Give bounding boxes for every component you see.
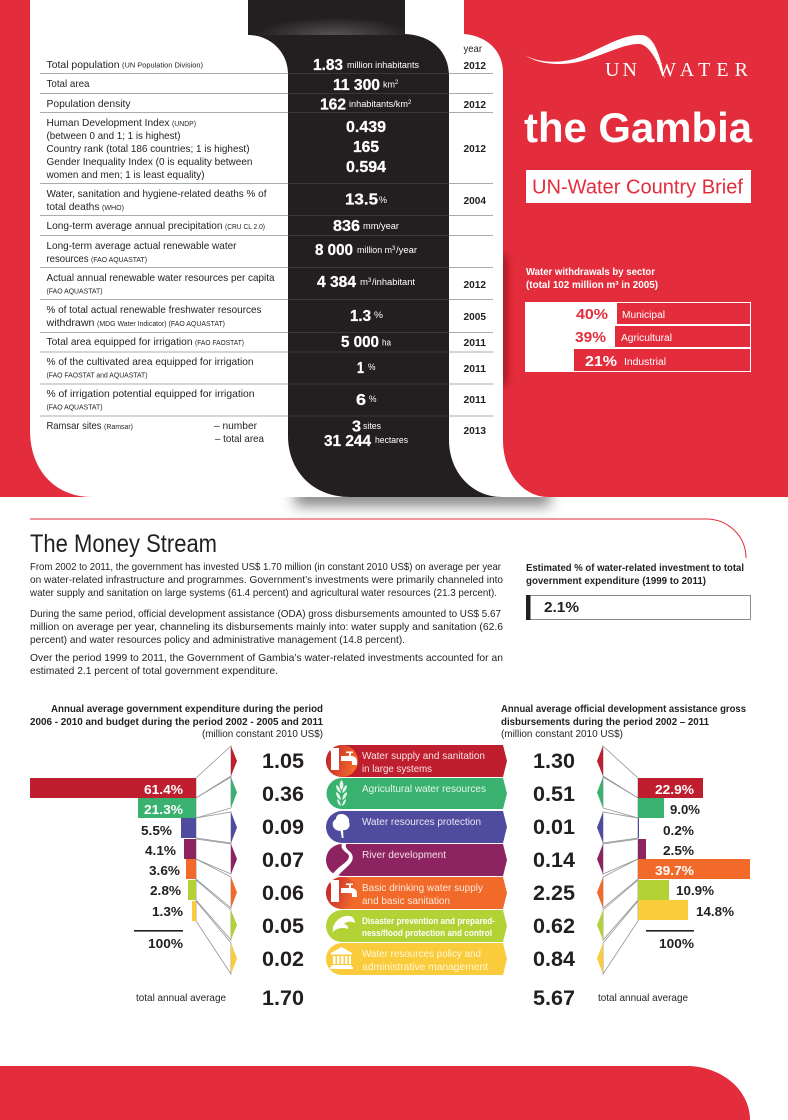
category: basic drinking water supply <box>326 877 507 909</box>
chart: water withdrawals by sector: 40% <box>576 307 608 323</box>
indicator labels: women and men; 1 is least equality) <box>46 169 204 181</box>
indicator labels: – number <box>214 420 257 432</box>
indicator values: inhabitants/km <box>349 99 408 109</box>
chart heading: government expenditure: Annual average government expenditure during the period <box>51 703 323 715</box>
icon: institution building <box>330 947 353 969</box>
percentage labels: 39.7% <box>655 864 694 878</box>
indicator values: % <box>368 362 376 372</box>
text block: money stream narrative: percent) and water resources policy and administrative management (14.8 percent). <box>30 634 405 646</box>
indicator values: m <box>360 277 368 287</box>
indicator values: mm/year <box>363 221 399 231</box>
ODA values: total annual average <box>598 992 688 1004</box>
percentage labels <box>134 783 183 951</box>
category: disaster prevention: Disaster prevention and prepared- <box>362 916 495 927</box>
chart heading: government expenditure <box>30 703 323 740</box>
government values: 0.06 <box>262 882 304 905</box>
UN-Water logo: UN <box>605 59 637 81</box>
percentage labels: 100% <box>659 937 694 951</box>
category: water supply and sanitation in large systems <box>326 745 507 777</box>
percentage labels: 9.0% <box>670 803 700 817</box>
category: basic drinking water supply: and basic sanitation <box>362 895 450 907</box>
ODA values <box>533 750 688 1010</box>
indicator labels: – total area <box>215 433 264 445</box>
indicator values: ha <box>382 338 391 348</box>
subtitle box: UN-Water Country Brief <box>532 176 743 198</box>
indicator labels <box>45 59 275 445</box>
indicator labels: (Ramsar) <box>104 424 133 431</box>
indicator values: 1.3 <box>350 308 371 325</box>
indicator labels: (CRU CL 2.0) <box>225 224 265 231</box>
chart heading: Water withdrawals by sector <box>526 266 655 278</box>
year column: 2005 <box>464 311 486 323</box>
indicator values: 3 <box>352 418 361 436</box>
indicator labels: Human Development Index <box>46 117 170 129</box>
category: water resources protection <box>326 811 507 843</box>
chart: government expenditure bars <box>30 746 304 1010</box>
text block: money stream narrative: From 2002 to 2011, the government has invested US$ 1.70 million (in constant 2010 US$) on average per year <box>30 561 501 573</box>
percentage labels: 14.8% <box>696 905 734 919</box>
category: agricultural water resources <box>326 778 507 809</box>
chart heading: government expenditure: (million constant 2010 US$) <box>202 728 323 740</box>
indicator values: 11 300 <box>333 77 380 94</box>
indicator labels: Ramsar sites <box>46 420 102 432</box>
indicator values: 8 000 <box>315 242 353 259</box>
category: water resources policy: Water resources policy and <box>362 948 481 960</box>
chart heading <box>526 266 658 291</box>
category: water resources policy: administrative management <box>362 961 488 973</box>
black values column <box>248 0 502 497</box>
indicator labels: Total area equipped for irrigation <box>46 336 193 348</box>
percentage labels: 3.6% <box>149 864 180 878</box>
government values: 0.07 <box>262 849 304 872</box>
callout: investment share: government expenditure (1999 to 2011) <box>526 575 706 587</box>
government values: 1.70 <box>262 987 304 1010</box>
indicator values <box>313 57 419 450</box>
percentage labels <box>646 783 734 951</box>
government values: total annual average <box>136 992 226 1004</box>
year column: 2012 <box>464 60 486 72</box>
year column: 2013 <box>464 425 486 437</box>
chart: water withdrawals by sector: Agricultural <box>621 333 672 344</box>
government values: 0.09 <box>262 816 304 839</box>
indicator values: 3 <box>368 278 372 284</box>
chart heading: official development assistance: (million constant 2010 US$) <box>501 728 623 740</box>
row divider lines <box>40 74 493 416</box>
chart: water withdrawals by sector: Industrial <box>624 357 666 368</box>
indicator values: 1 <box>357 360 364 377</box>
indicator values: million inhabitants <box>347 60 419 70</box>
chart heading: (total 102 million m³ in 2005) <box>526 279 658 291</box>
subtitle box <box>526 170 751 203</box>
indicator labels: Country rank (total 186 countries; 1 is highest) <box>46 143 250 155</box>
indicator labels: (FAO AQUASTAT) <box>46 404 102 412</box>
year column: 2012 <box>464 143 486 155</box>
category: water resources protection: Water resources protection <box>362 816 481 828</box>
indicator labels: (between 0 and 1; 1 is highest) <box>46 130 180 142</box>
icon: tree <box>333 814 350 838</box>
year column: 2011 <box>464 394 486 406</box>
indicator labels: Total area <box>46 78 90 90</box>
percentage labels: 21.3% <box>144 803 183 817</box>
indicator values: 0.439 <box>346 119 386 136</box>
chart: official development assistance bars <box>533 746 750 1010</box>
text block: money stream narrative: estimated 2.1 percent of total government expenditure. <box>30 665 278 677</box>
indicator labels: (UNDP) <box>172 121 196 128</box>
percentage labels: 22.9% <box>655 783 694 797</box>
white table panel <box>30 0 548 497</box>
ODA values: 0.62 <box>533 915 575 938</box>
indicator values: % <box>374 310 383 320</box>
category: water supply and sanitation in large systems: in large systems <box>362 763 432 775</box>
section rule <box>30 519 746 558</box>
chart: water withdrawals by sector <box>525 266 751 372</box>
indicator labels: Total population <box>46 59 120 71</box>
indicator values: million m <box>357 245 392 255</box>
indicator labels: Water, sanitation and hygiene-related deaths % of <box>46 188 267 200</box>
indicator values: /year <box>396 245 417 255</box>
indicator values: % <box>379 195 387 205</box>
indicator labels: % of the cultivated area equipped for irrigation <box>46 356 254 368</box>
text block: money stream narrative: water supply and sanitation on large systems (61.4 percent) and agricultural water resources (21.3 percent). <box>29 587 497 599</box>
indicator labels: Population density <box>46 98 131 110</box>
icon: wheat <box>336 780 347 806</box>
year column: 2011 <box>464 363 486 375</box>
connector shapes <box>603 746 638 974</box>
indicator values: sites <box>363 421 381 431</box>
ODA values: 0.14 <box>533 849 575 872</box>
legend: water categories <box>326 745 507 975</box>
heading: The Money Stream: The Money Stream <box>30 530 217 558</box>
bottom red band <box>0 1066 750 1120</box>
year column: 2012 <box>464 279 486 291</box>
arrow markers <box>231 746 237 974</box>
indicator labels: Gender Inequality Index (0 is equality between <box>46 156 253 168</box>
icon: river <box>331 844 353 876</box>
indicator values: 2 <box>395 80 399 86</box>
year column <box>464 43 486 437</box>
text block: money stream narrative: million on average per year, channeling its disbursements mainly into: water supply and sanitation (62.6 <box>30 621 503 633</box>
indicator labels: Long-term average actual renewable water <box>46 240 237 252</box>
indicator values: 836 <box>333 218 360 235</box>
indicator labels: (UN Population Division) <box>122 62 203 70</box>
chart: water withdrawals by sector: 21% <box>585 354 617 370</box>
indicator labels: (WHO) <box>102 205 124 212</box>
category: agricultural water resources: Agricultural water resources <box>362 783 486 795</box>
ODA values: 0.84 <box>533 948 575 971</box>
connector shapes <box>196 746 231 974</box>
percentage labels: 100% <box>148 937 183 951</box>
ODA values: 5.67 <box>533 987 575 1010</box>
percentage bars <box>30 778 196 921</box>
indicator values: % <box>369 394 376 404</box>
shadow on red beside white panel <box>497 255 507 385</box>
percentage labels: 0.2% <box>663 824 694 838</box>
UN-Water logo: WATER <box>657 59 749 81</box>
text block: money stream narrative <box>29 561 503 677</box>
icon: wave <box>332 916 355 933</box>
government values: 0.36 <box>262 783 304 806</box>
category: basic drinking water supply: Basic drinking water supply <box>362 882 484 894</box>
indicator values: 4 384 <box>317 274 356 291</box>
category: water resources policy <box>326 943 507 975</box>
red header background <box>0 0 788 497</box>
logo swoosh <box>525 35 665 79</box>
text block: money stream narrative: on water-related infrastructure and programmes. Government’s investments were primarily channeled into <box>30 574 503 586</box>
indicator labels: Long-term average annual precipitation <box>46 220 223 232</box>
year column: year <box>464 43 482 55</box>
indicator values: 6 <box>356 392 366 409</box>
indicator labels: (MDG Water Indicator) (FAO AQUASTAT) <box>97 321 225 328</box>
indicator labels: (FAO AQUASTAT) <box>91 257 147 264</box>
panel: country data table <box>30 0 548 497</box>
indicator values: 5 000 <box>341 334 379 351</box>
drop shadow under data table <box>295 486 550 506</box>
icon: tap and tank <box>330 880 357 902</box>
arrow markers <box>597 746 603 974</box>
indicator values: 2 <box>408 100 412 106</box>
callout: investment share: Estimated % of water-related investment to total <box>526 562 744 574</box>
category: water supply and sanitation in large systems: Water supply and sanitation <box>362 750 485 762</box>
chart: water withdrawals by sector: 39% <box>575 330 606 346</box>
indicator values: 13.5 <box>345 192 378 208</box>
category: river development: River development <box>362 849 446 861</box>
ODA values: 1.30 <box>533 750 575 773</box>
top glow <box>248 0 405 35</box>
indicator labels: % of irrigation potential equipped for irrigation <box>46 388 255 400</box>
indicator values: 1.83 <box>313 57 343 74</box>
government values: 0.02 <box>262 948 304 971</box>
government values <box>136 750 304 1010</box>
ODA values: 0.01 <box>533 816 575 839</box>
indicator values: 3 <box>392 246 396 252</box>
percentage labels: 2.5% <box>663 844 694 858</box>
percentage labels: 61.4% <box>144 783 183 797</box>
indicator values: 165 <box>353 139 379 156</box>
title: the Gambia: the Gambia <box>524 104 753 151</box>
percentage labels: 10.9% <box>676 884 714 898</box>
category: disaster prevention <box>326 910 507 942</box>
percentage bars <box>638 778 750 920</box>
indicator labels: % of total actual renewable freshwater resources <box>46 304 262 316</box>
government values: 0.05 <box>262 915 304 938</box>
year column: 2012 <box>464 99 486 111</box>
government values: 1.05 <box>262 750 304 773</box>
UN-Water logo <box>525 35 749 81</box>
year column: 2004 <box>464 195 486 207</box>
text block: money stream narrative: During the same period, official development assistance (ODA) gross disbursements amounted to US$ 5.67 <box>30 608 501 620</box>
indicator values: 0.594 <box>346 159 386 176</box>
indicator labels: (FAO FAOSTAT and AQUASTAT) <box>46 372 148 380</box>
percentage labels: 5.5% <box>141 824 172 838</box>
callout: investment share <box>526 562 750 620</box>
indicator values: 31 244 <box>324 433 371 450</box>
chart heading: official development assistance <box>501 703 746 740</box>
indicator values: hectares <box>375 435 408 445</box>
icon: tap and tank <box>330 748 357 770</box>
indicator labels: (FAO AQUASTAT) <box>46 288 102 296</box>
percentage labels: 4.1% <box>145 844 176 858</box>
ODA values: 2.25 <box>533 882 575 905</box>
chart heading: official development assistance: Annual average official development assistance gross <box>501 703 746 715</box>
indicator labels: Actual annual renewable water resources per capita <box>46 272 275 284</box>
indicator values: km <box>383 80 395 90</box>
percentage labels: 1.3% <box>152 905 183 919</box>
indicator labels: withdrawn <box>45 317 95 329</box>
percentage labels: 2.8% <box>150 884 181 898</box>
indicator labels: (FAO FAOSTAT) <box>195 340 244 347</box>
callout: investment share: 2.1% <box>544 600 579 616</box>
category: river development <box>326 844 507 876</box>
indicator labels: total deaths <box>46 201 100 213</box>
chart heading: government expenditure: 2006 - 2010 and budget during the period 2002 - 2005 and 2011 <box>30 716 323 728</box>
ODA values: 0.51 <box>533 783 575 806</box>
category: disaster prevention: ness/flood protection and control <box>362 928 492 939</box>
text block: money stream narrative: Over the period 1999 to 2011, the Government of Gambia’s water-related investments accounted for an <box>30 652 503 664</box>
chart: water withdrawals by sector: Municipal <box>622 310 665 321</box>
chart heading: official development assistance: disbursements during the period 2002 – 2011 <box>501 716 709 728</box>
indicator values: /inhabitant <box>372 277 416 287</box>
indicator labels: resources <box>46 253 88 265</box>
indicator values: 162 <box>320 96 346 114</box>
year column: 2011 <box>464 337 486 349</box>
